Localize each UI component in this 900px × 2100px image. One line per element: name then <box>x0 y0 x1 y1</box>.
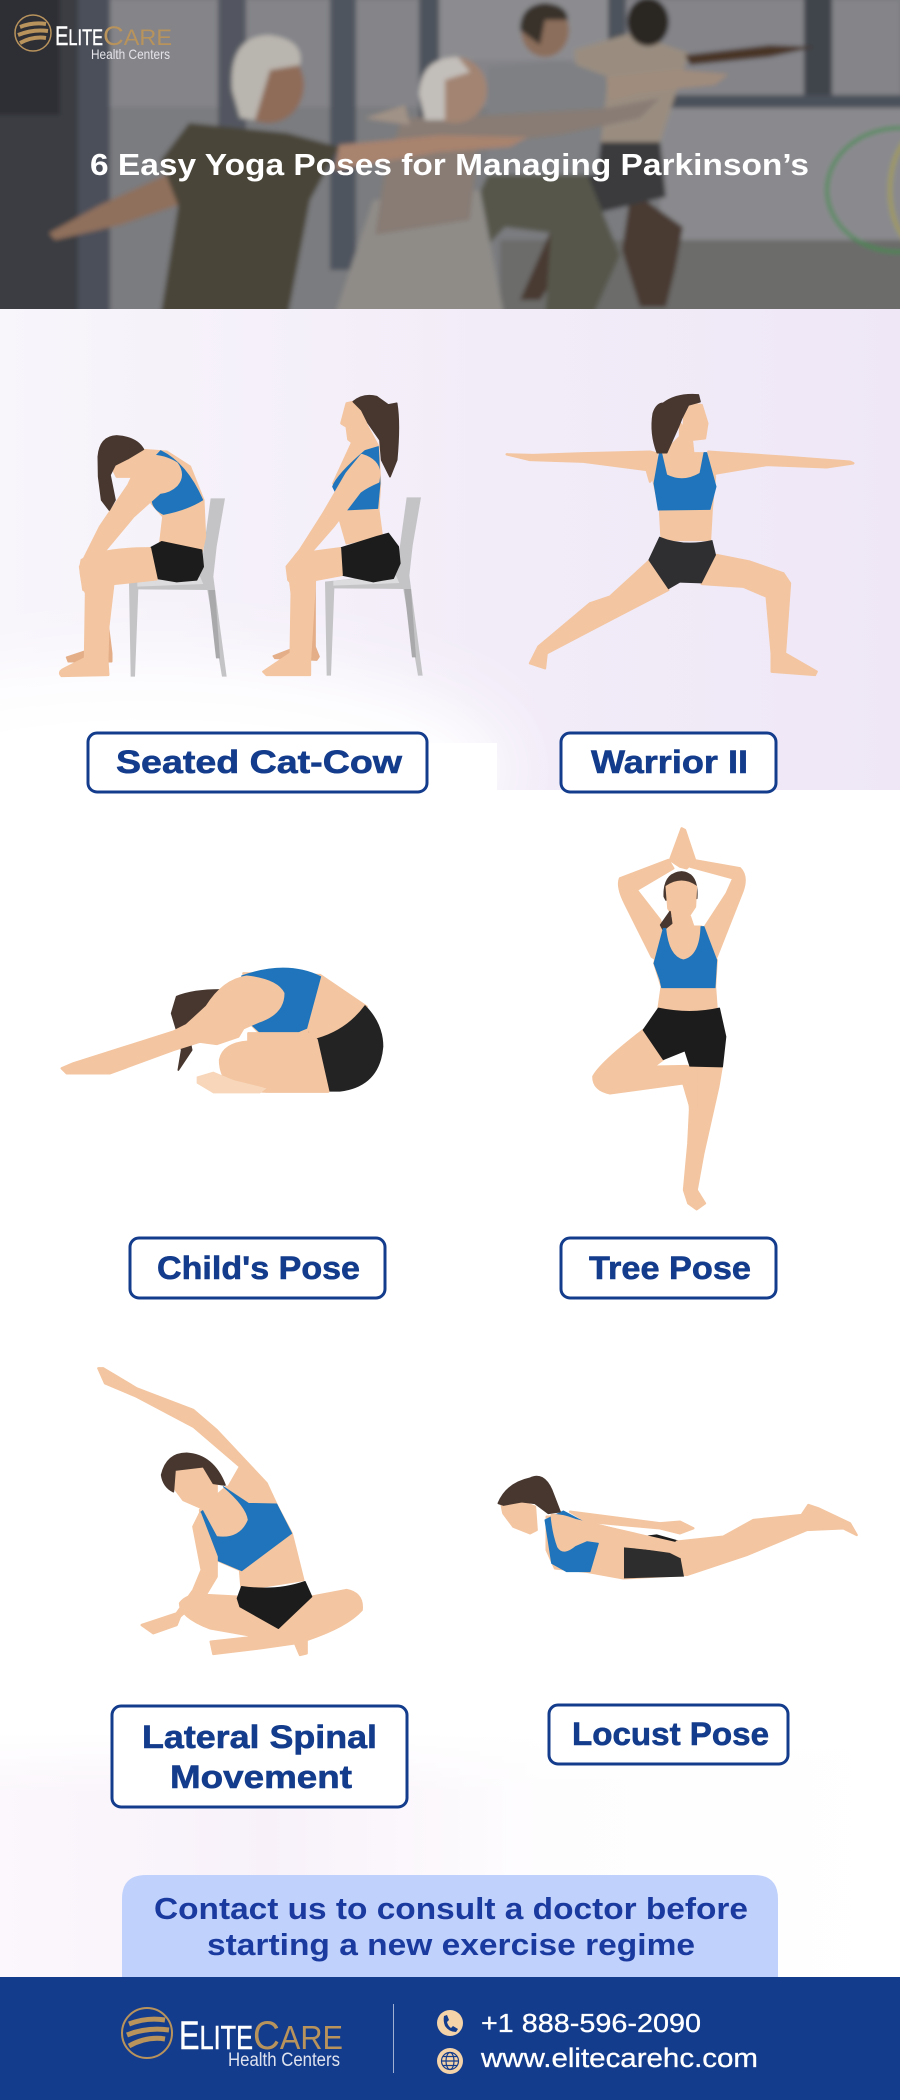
chair <box>325 497 423 676</box>
icon: logo swirl <box>15 15 51 51</box>
callout: contact us: starting a new exercise regime <box>207 1927 695 1962</box>
header logo: Health Centers <box>91 46 170 62</box>
icon: green hoops <box>827 128 900 252</box>
label: Warrior II: Warrior II <box>591 744 748 780</box>
header photo: seniors doing yoga <box>0 0 900 320</box>
label: Lateral Spinal Movement: Movement <box>170 1759 352 1795</box>
figure: tree pose <box>593 828 745 1209</box>
figure: locust pose <box>498 1477 857 1578</box>
figure: child's pose <box>62 968 383 1093</box>
icon: globe <box>437 2048 463 2074</box>
label: Locust Pose: Locust Pose <box>572 1716 769 1752</box>
icon: footer logo swirl <box>122 2008 172 2058</box>
label: Seated Cat-Cow <box>88 733 427 792</box>
page background tint <box>0 309 900 1977</box>
label: Tree Pose: Tree Pose <box>589 1250 751 1286</box>
website: www.elitecarehc.com <box>480 2043 758 2073</box>
figure: seated cat pose <box>60 436 227 677</box>
label: Lateral Spinal Movement <box>112 1706 407 1807</box>
person 2 <box>333 57 660 320</box>
header logo <box>15 15 172 62</box>
icon: phone <box>437 2010 463 2036</box>
footer logo: CARE <box>253 2014 343 2058</box>
label: Seated Cat-Cow: Seated Cat-Cow <box>116 744 402 780</box>
header logo: CARE <box>103 21 172 51</box>
footer <box>0 1977 900 2100</box>
callout: contact us <box>122 1875 778 1977</box>
label: Warrior II <box>561 733 776 792</box>
footer logo: Health Centers <box>228 2050 340 2071</box>
person 3 <box>479 0 727 309</box>
label: Child's Pose <box>130 1238 385 1298</box>
header logo: ELITE <box>55 21 103 51</box>
phone number: +1 888-596-2090 <box>481 2008 701 2038</box>
label: Child's Pose: Child's Pose <box>157 1250 360 1286</box>
figure: lateral spinal movement <box>98 1368 362 1655</box>
figure: seated cow pose <box>263 396 423 676</box>
person 1 <box>49 35 528 320</box>
label: Locust Pose <box>549 1705 788 1764</box>
label: Tree Pose <box>561 1238 776 1298</box>
chair <box>129 498 227 677</box>
footer logo: ELITE <box>179 2014 253 2058</box>
footer logo <box>122 2008 343 2071</box>
title: 6 Easy Yoga Poses for Managing Parkinson’s <box>90 147 809 182</box>
label: Lateral Spinal Movement: Lateral Spinal <box>142 1719 377 1755</box>
figure: warrior II <box>507 395 853 675</box>
callout: contact us: Contact us to consult a doctor before <box>154 1891 748 1926</box>
person 4 <box>520 0 815 307</box>
